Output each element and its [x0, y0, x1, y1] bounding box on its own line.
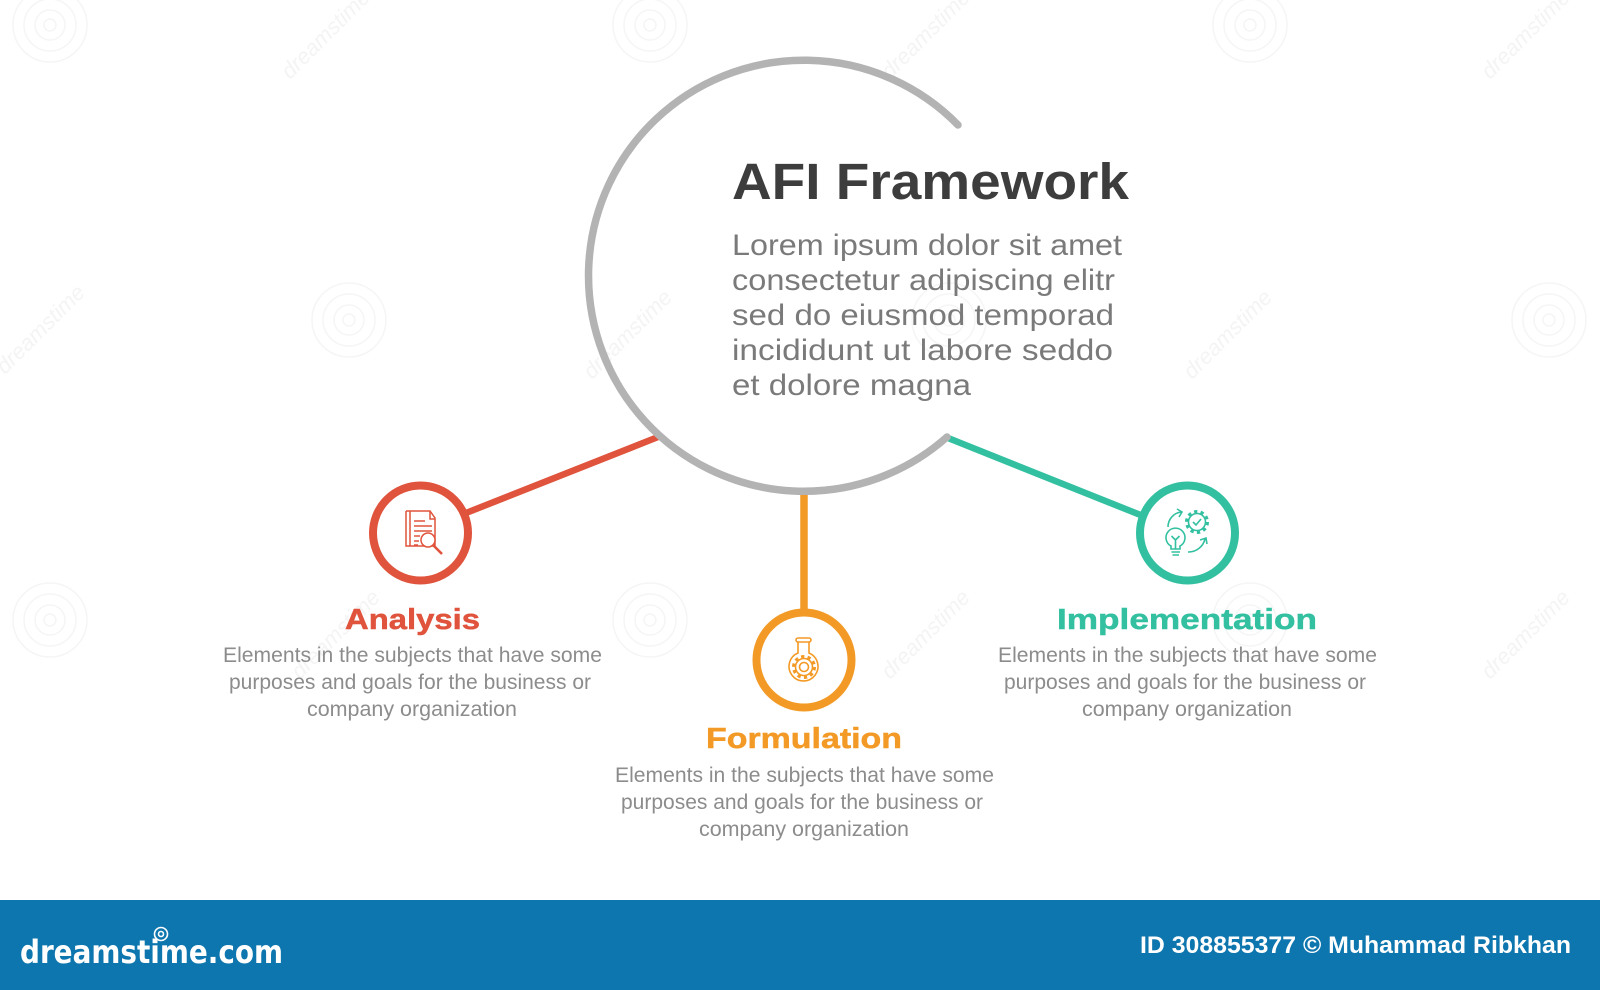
watermark text: dreamstime	[286, 585, 385, 684]
implementation description: Elements in the subjects that have some	[998, 643, 1377, 667]
implementation heading: Implementation	[1057, 604, 1317, 636]
watermark text	[0, 0, 1575, 684]
main open circle	[589, 60, 958, 491]
analysis description	[223, 643, 602, 721]
watermark text: dreamstime	[876, 585, 975, 684]
main body text: et dolore magna	[732, 369, 971, 402]
analysis ring	[373, 486, 468, 580]
implementation description: purposes and goals for the business or	[1004, 670, 1366, 694]
analysis heading: Analysis	[345, 604, 480, 636]
title: AFI Framework	[732, 153, 1130, 210]
implementation ring	[1140, 486, 1235, 580]
formulation description: company organization	[699, 817, 909, 841]
main body text: Lorem ipsum dolor sit amet	[732, 229, 1123, 262]
main body text: sed do eiusmod temporad	[732, 299, 1114, 332]
connector: implementation	[948, 438, 1143, 516]
formulation description	[615, 763, 994, 841]
watermark text: dreamstime	[1476, 585, 1575, 684]
analysis description: company organization	[307, 697, 517, 721]
main body text: incididunt ut labore seddo	[732, 334, 1113, 367]
node: analysis	[223, 486, 602, 721]
implementation description	[998, 643, 1377, 721]
footer banner	[0, 900, 1600, 990]
node: formulation	[615, 612, 994, 841]
footer credit: ID 308855377 © Muhammad Ribkhan	[1140, 932, 1571, 959]
main body text: consectetur adipiscing elitr	[732, 264, 1115, 297]
watermark text: dreamstime	[578, 285, 677, 384]
connector: analysis	[466, 437, 658, 513]
icon: idea, gear and arrows	[1166, 509, 1208, 555]
icon: flask with gear	[789, 638, 818, 681]
main body text	[732, 229, 1123, 402]
analysis description: Elements in the subjects that have some	[223, 643, 602, 667]
analysis description: purposes and goals for the business or	[229, 670, 591, 694]
formulation description: Elements in the subjects that have some	[615, 763, 994, 787]
node: implementation	[998, 486, 1377, 721]
watermark pattern	[13, 0, 1586, 657]
formulation ring	[756, 612, 852, 708]
footer logo: dreamstime.com	[20, 933, 283, 971]
formulation heading: Formulation	[706, 723, 902, 755]
watermark text: dreamstime	[1178, 285, 1277, 384]
implementation description: company organization	[1082, 697, 1292, 721]
icon: document with magnifier	[406, 511, 442, 554]
connector: formulation	[800, 490, 808, 612]
formulation description: purposes and goals for the business or	[621, 790, 983, 814]
footer logo spiral	[154, 928, 168, 940]
